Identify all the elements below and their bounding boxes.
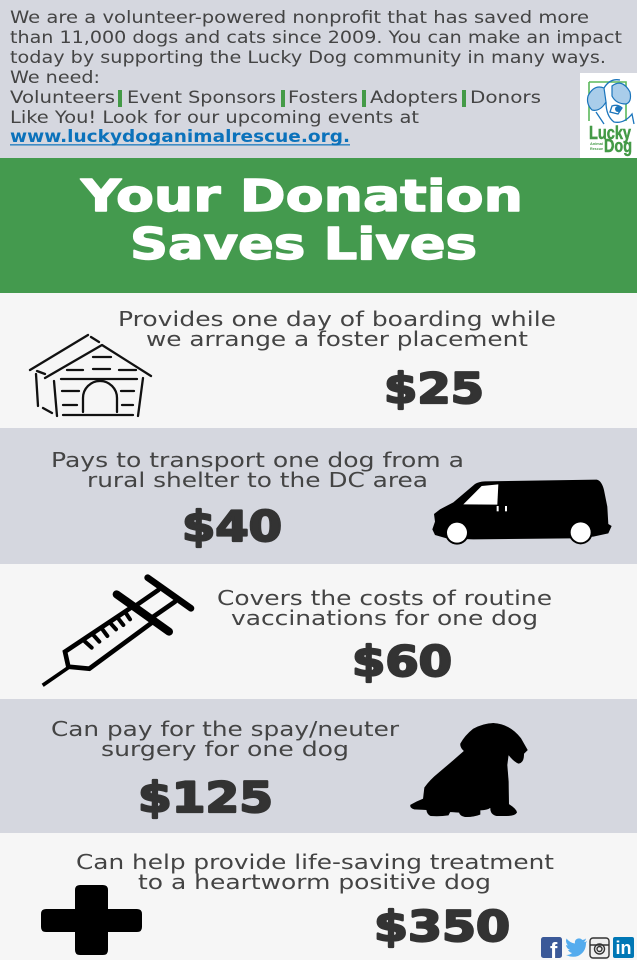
logo: Lucky Dog [580,73,637,158]
logo: Lucky Dog: Animal [590,141,603,146]
logo: Lucky Dog: Rescue [590,146,604,151]
amount: $125 [138,773,273,822]
intro text: today by supporting the Lucky Dog community in many ways. [10,48,606,68]
description: we arrange a foster placement [146,327,528,351]
needs list: Volunteers [10,88,115,108]
panel: intro [0,0,637,158]
amount: $60 [352,637,452,686]
needs list: Donors [470,88,541,108]
icon: dog house [30,335,151,416]
intro text: We are a volunteer-powered nonprofit that has saved more [10,8,589,28]
amount: $25 [384,364,484,413]
amount: $40 [182,502,282,551]
description [76,850,554,894]
icon: instagram [590,938,609,958]
website link: www.luckydoganimalrescue.org. [10,127,350,147]
icon: van [432,480,612,545]
title banner [0,158,637,293]
panel: $40 transport [0,428,637,564]
needs list: Fosters [288,88,358,108]
panel: $350 treatment [0,833,637,960]
intro text: We need: [10,68,100,88]
intro text [10,8,622,88]
description: to a heartworm positive dog [138,870,491,894]
description: Pays to transport one dog from a [51,448,464,472]
panel: $25 boarding [0,293,637,428]
description: Provides one day of boarding while [118,307,556,331]
intro text: than 11,000 dogs and cats since 2009. You can make an impact [10,28,622,48]
description [51,448,464,492]
amount: $350 [374,902,510,951]
needs list: Event Sponsors [127,88,276,108]
description: Can help provide life-saving treatment [76,850,554,874]
needs list: Adopters [370,88,458,108]
events text: Like You! Look for our upcoming events at [10,108,419,128]
description: vaccinations for one dog [231,606,538,630]
social icons [541,937,634,960]
heading [80,171,523,270]
icon: twitter [566,938,587,957]
panel: $125 spay/neuter [0,699,637,833]
icon: puppy silhouette [411,723,527,817]
icon: linkedin: in [616,938,632,958]
description: surgery for one dog [101,737,349,761]
icon: syringe [43,578,191,685]
description: Can pay for the spay/neuter [51,717,400,741]
needs list [10,88,541,108]
description: rural shelter to the DC area [87,468,428,492]
panel: $60 vaccinations [0,564,637,699]
description: Covers the costs of routine [217,586,552,610]
icon: medical cross [41,885,142,955]
description [217,586,552,630]
description [51,717,400,761]
heading: Saves Lives [130,219,477,270]
description [118,307,556,351]
heading: Your Donation [80,171,523,222]
